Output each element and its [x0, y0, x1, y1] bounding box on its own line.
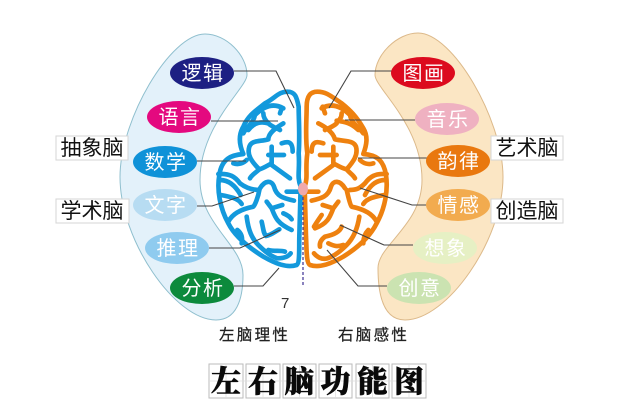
pill: 创意 — [387, 272, 451, 304]
title: 脑 — [284, 366, 314, 399]
title: 右 — [248, 366, 278, 399]
title: 左 — [211, 366, 241, 399]
leader lines — [197, 71, 428, 286]
pill: 音乐: 音乐 — [426, 108, 470, 131]
pill: 想象: 想象 — [424, 237, 468, 260]
small mark: 7 — [281, 295, 289, 312]
pill: 想象 — [413, 232, 477, 264]
pill: 分析 — [170, 272, 234, 304]
midline dashed axis — [302, 192, 304, 285]
panel: left brain band — [120, 34, 247, 320]
title: 功 — [320, 366, 350, 399]
pill: 逻辑: 逻辑 — [182, 62, 224, 85]
pill: 音乐 — [415, 103, 479, 135]
title: 能 — [358, 366, 388, 399]
pill: 创意: 创意 — [398, 277, 442, 300]
label: 创造脑: 创造脑 — [496, 200, 558, 223]
pill: 推理 — [145, 232, 209, 264]
pill: 语言: 语言 — [158, 106, 202, 129]
pill: 情感 — [426, 189, 490, 221]
pill: 数学: 数学 — [144, 151, 188, 174]
pill: 图画 — [391, 57, 455, 89]
brain: left hemisphere — [218, 92, 301, 266]
pill: 文字: 文字 — [144, 194, 188, 217]
brain: right hemisphere — [305, 92, 387, 266]
pill: 语言 — [147, 101, 211, 133]
title — [209, 364, 426, 399]
pill: 图画: 图画 — [402, 63, 446, 85]
pill: 逻辑 — [170, 57, 234, 89]
pill: 韵律 — [426, 145, 490, 177]
panel: right brain band — [375, 33, 503, 320]
label: 学术脑: 学术脑 — [60, 200, 124, 223]
pill: 文字 — [133, 189, 197, 221]
centre marker — [298, 182, 308, 196]
caption: right brain: 右脑感性 — [338, 326, 409, 344]
pill: 韵律: 韵律 — [438, 150, 480, 173]
pill: 推理: 推理 — [156, 237, 200, 260]
caption: left brain: 左脑理性 — [219, 326, 290, 344]
label: 抽象脑: 抽象脑 — [60, 137, 124, 160]
pill: 情感: 情感 — [438, 194, 480, 217]
title: 图 — [394, 366, 424, 399]
label: 艺术脑: 艺术脑 — [496, 137, 558, 160]
pill: 分析: 分析 — [182, 277, 224, 300]
pill: 数学 — [133, 146, 197, 178]
